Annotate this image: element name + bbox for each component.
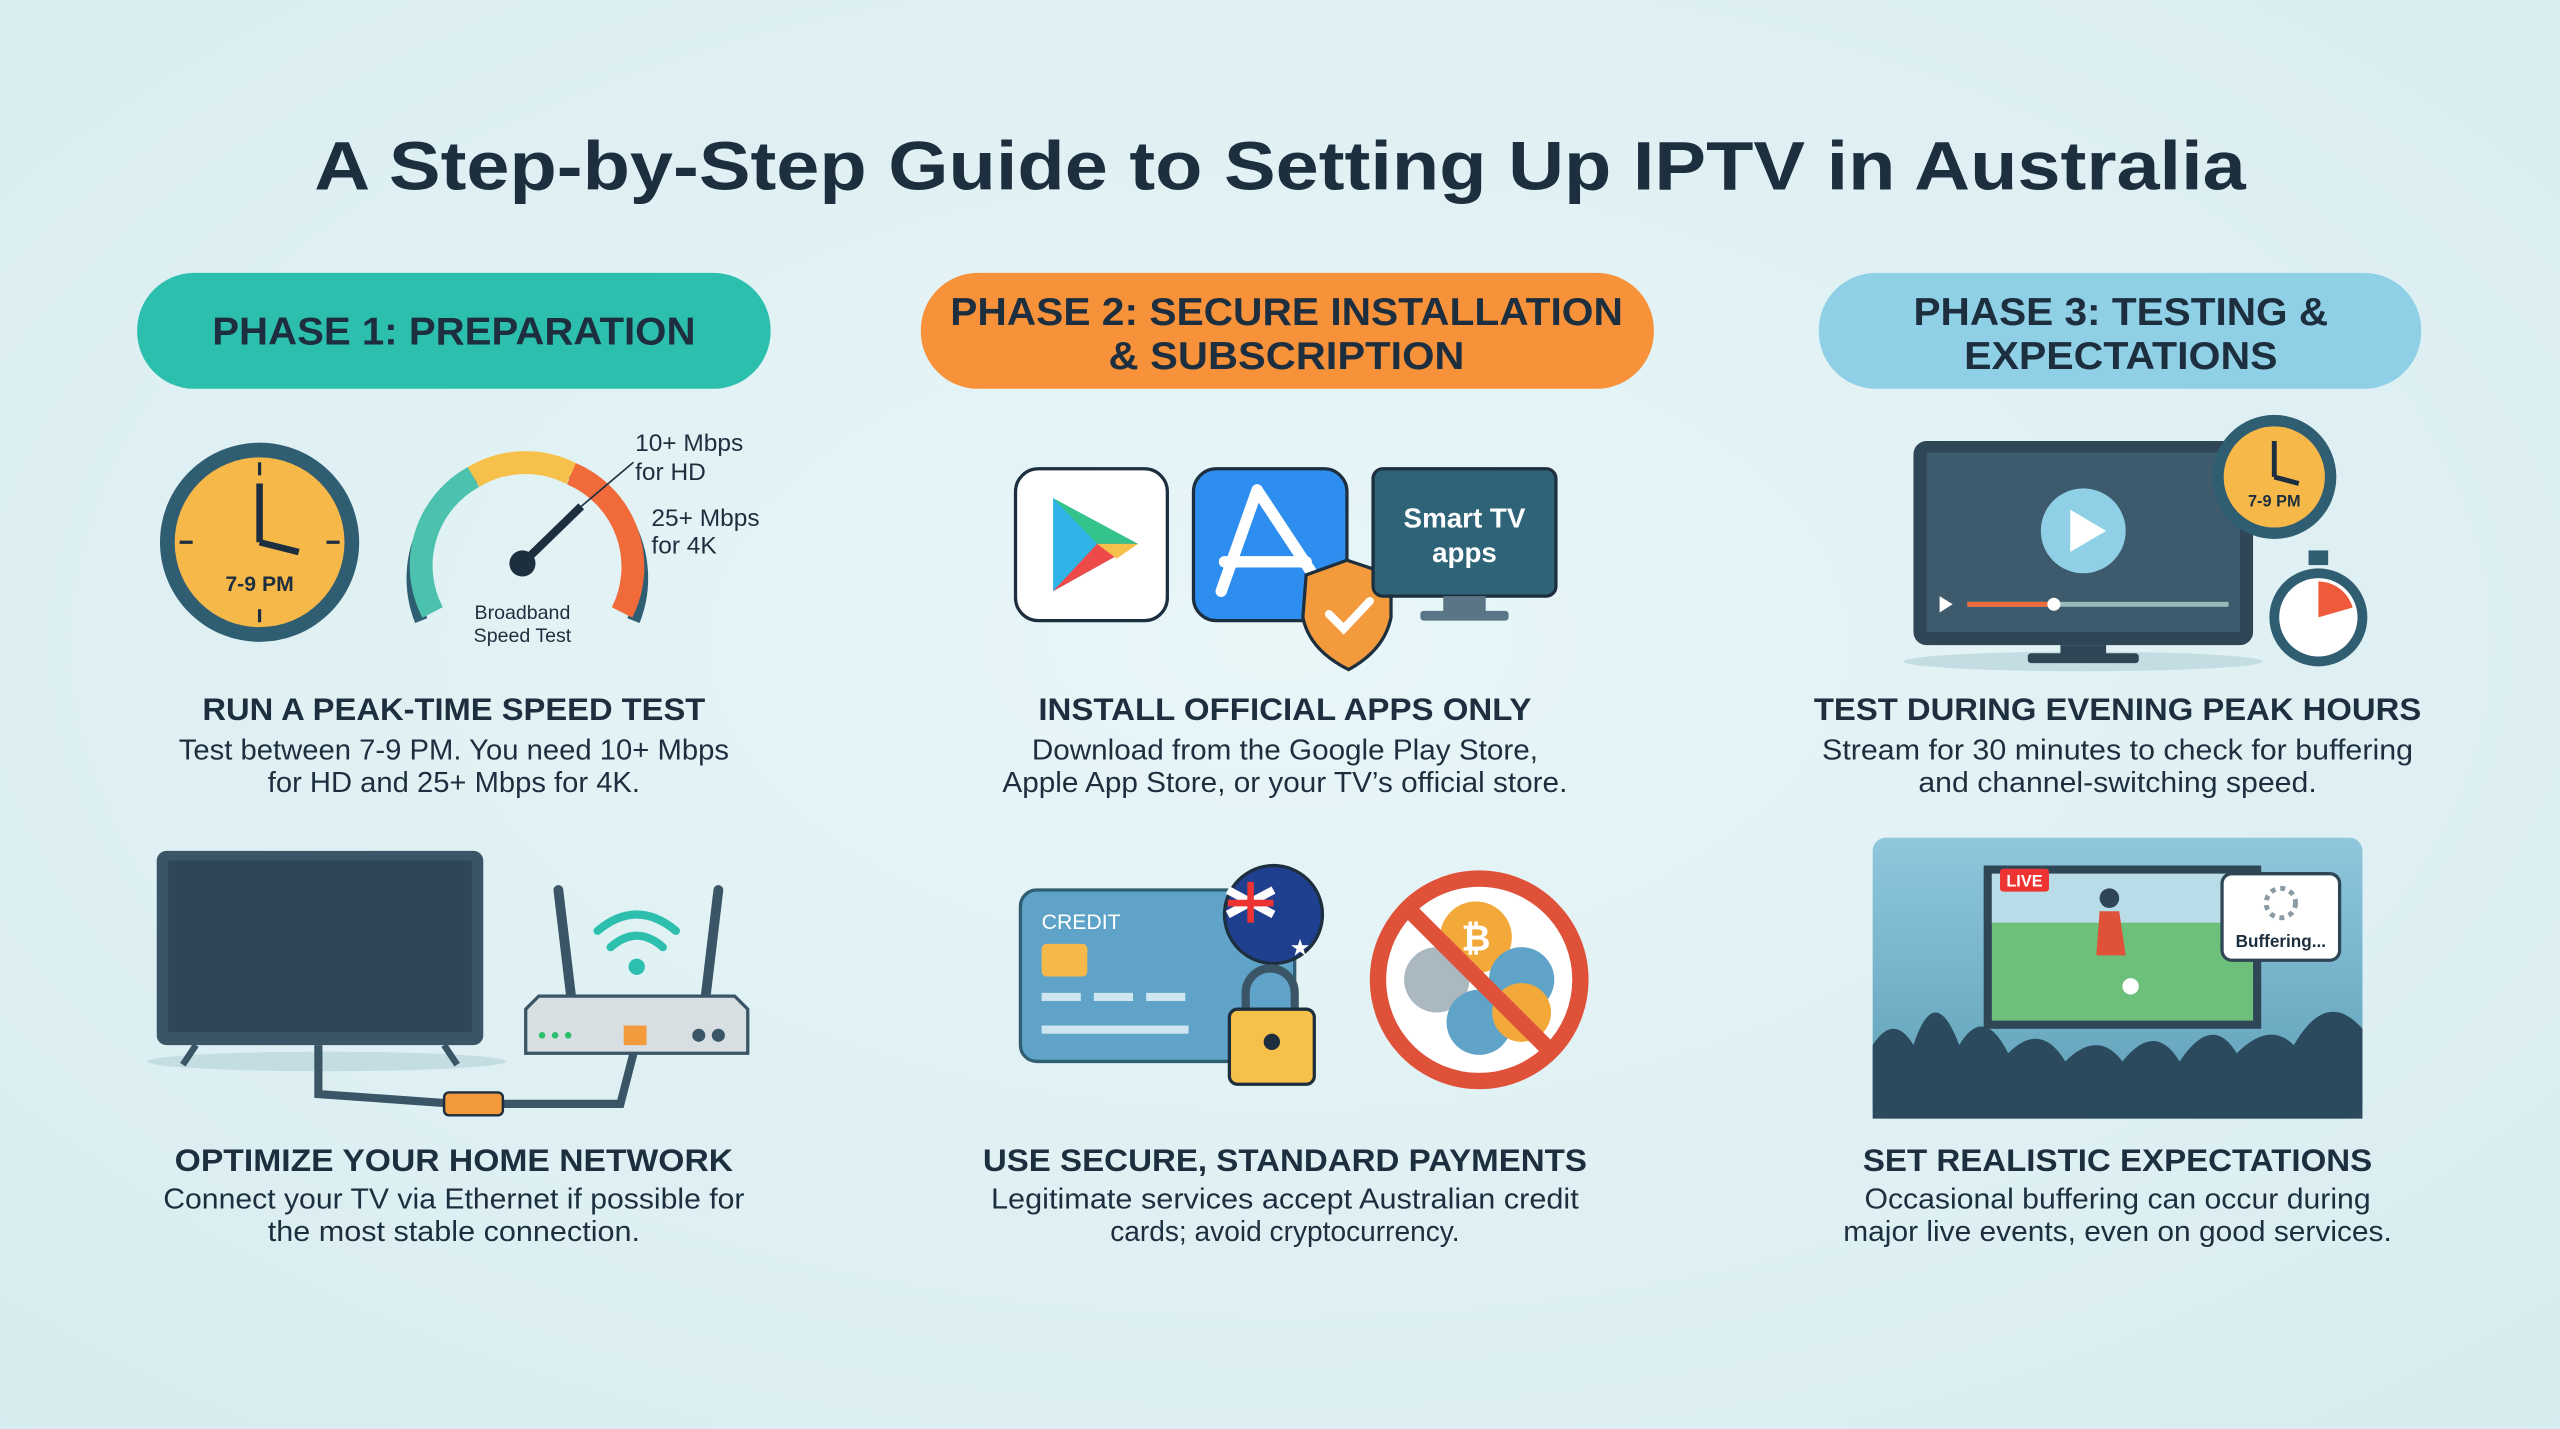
pill: phase 3	[1819, 273, 2421, 389]
text: expectations: SET REALISTIC EXPECTATIONS	[1863, 1143, 2372, 1178]
icon: app stores: apps	[1432, 537, 1497, 568]
icon: app stores: Smart TV	[1404, 503, 1526, 534]
text: speed test: Test between 7-9 PM. You need 10+ Mbps	[179, 734, 729, 766]
icon: credit card, lock, no crypto	[1020, 866, 1580, 1084]
icon: speed gauge: 25+ Mbps	[651, 505, 760, 532]
text: payments: cards; avoid cryptocurrency.	[1110, 1216, 1460, 1248]
pill: phase 2: & SUBSCRIPTION	[1109, 335, 1464, 378]
text: expectations	[1843, 1143, 2392, 1248]
icon: speed gauge	[413, 430, 760, 647]
icon: speed gauge: Broadband	[475, 602, 570, 624]
text: speed test: RUN A PEAK-TIME SPEED TEST	[202, 692, 705, 727]
text: expectations: major live events, even on good services.	[1843, 1216, 2392, 1248]
icon: clock 7-9 PM	[160, 443, 359, 642]
pill: phase 1	[137, 273, 771, 389]
text: speed test: for HD and 25+ Mbps for 4K.	[268, 767, 640, 799]
text: official apps: Download from the Google Play Store,	[1032, 734, 1538, 766]
icon: speed gauge: for HD	[635, 459, 706, 486]
text: evening peak: and channel-switching speed.	[1918, 767, 2317, 799]
icon: speed gauge: for 4K	[651, 533, 717, 560]
icon: TV with play and clocks: 7-9 PM	[2248, 492, 2301, 510]
text: payments: Legitimate services accept Australian credit	[991, 1183, 1579, 1215]
text: official apps: Apple App Store, or your TV’s official store.	[1002, 767, 1567, 799]
text: home network: OPTIMIZE YOUR HOME NETWORK	[175, 1143, 734, 1178]
text: evening peak	[1814, 692, 2421, 799]
icon: stadium buffering	[1873, 838, 2362, 1119]
text: home network: the most stable connection.	[268, 1216, 640, 1248]
pill: phase 1: PHASE 1: PREPARATION	[212, 311, 696, 354]
icon: speed gauge: Speed Test	[474, 625, 572, 647]
text: evening peak: Stream for 30 minutes to check for buffering	[1822, 734, 2413, 766]
text: payments	[983, 1143, 1587, 1248]
icon: TV and router with ethernet	[147, 851, 748, 1115]
icon: stadium buffering: Buffering...	[2236, 931, 2326, 951]
text: speed test	[179, 692, 729, 799]
pill: phase 2	[921, 273, 1654, 389]
pill: phase 3: EXPECTATIONS	[1964, 335, 2278, 378]
pill: phase 3: PHASE 3: TESTING &	[1913, 291, 2328, 334]
text: evening peak: TEST DURING EVENING PEAK HOURS	[1814, 692, 2421, 727]
icon: app stores	[1016, 469, 1556, 670]
text: home network: Connect your TV via Ethernet if possible for	[163, 1183, 745, 1215]
icon: credit card, lock, no crypto: ★	[1290, 934, 1310, 960]
text: official apps	[1002, 692, 1567, 799]
text: payments: USE SECURE, STANDARD PAYMENTS	[983, 1143, 1587, 1178]
icon: stadium buffering: LIVE	[2006, 873, 2043, 891]
text: official apps: INSTALL OFFICIAL APPS ONLY	[1038, 692, 1532, 727]
text: home network	[163, 1143, 745, 1248]
pill: phase 2: PHASE 2: SECURE INSTALLATION	[950, 291, 1623, 334]
icon: speed gauge: 10+ Mbps	[635, 430, 743, 457]
text: expectations: Occasional buffering can occur during	[1864, 1183, 2371, 1215]
icon: TV with play and clocks	[1904, 415, 2367, 671]
icon: credit card, lock, no crypto: CREDIT	[1042, 911, 1121, 934]
icon: credit card, lock, no crypto: ₿	[1461, 917, 1491, 958]
icon: clock 7-9 PM: 7-9 PM	[225, 573, 294, 596]
title: A Step-by-Step Guide to Setting Up IPTV in Australia	[314, 128, 2247, 205]
